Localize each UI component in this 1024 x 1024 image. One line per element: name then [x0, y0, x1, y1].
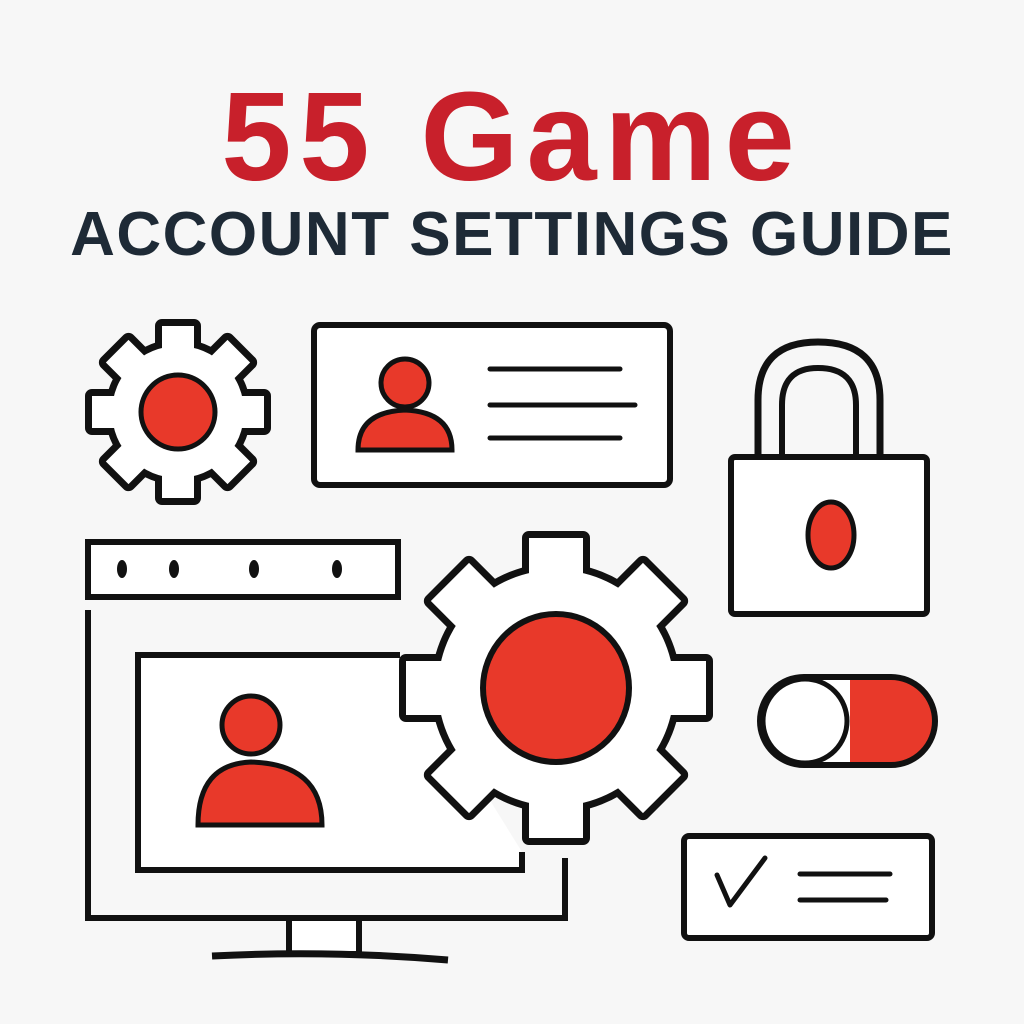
checklist card — [684, 836, 932, 938]
icon: big gear — [406, 538, 706, 838]
icon: padlock — [731, 342, 927, 614]
title: 55 Game — [221, 66, 803, 207]
subtitle: ACCOUNT SETTINGS GUIDE — [70, 200, 954, 269]
browser bar — [88, 542, 398, 597]
icon: monitor — [88, 610, 565, 960]
icon: toggle switch — [760, 677, 940, 765]
icon: small gear — [92, 326, 264, 498]
panel: profile card — [314, 325, 670, 485]
